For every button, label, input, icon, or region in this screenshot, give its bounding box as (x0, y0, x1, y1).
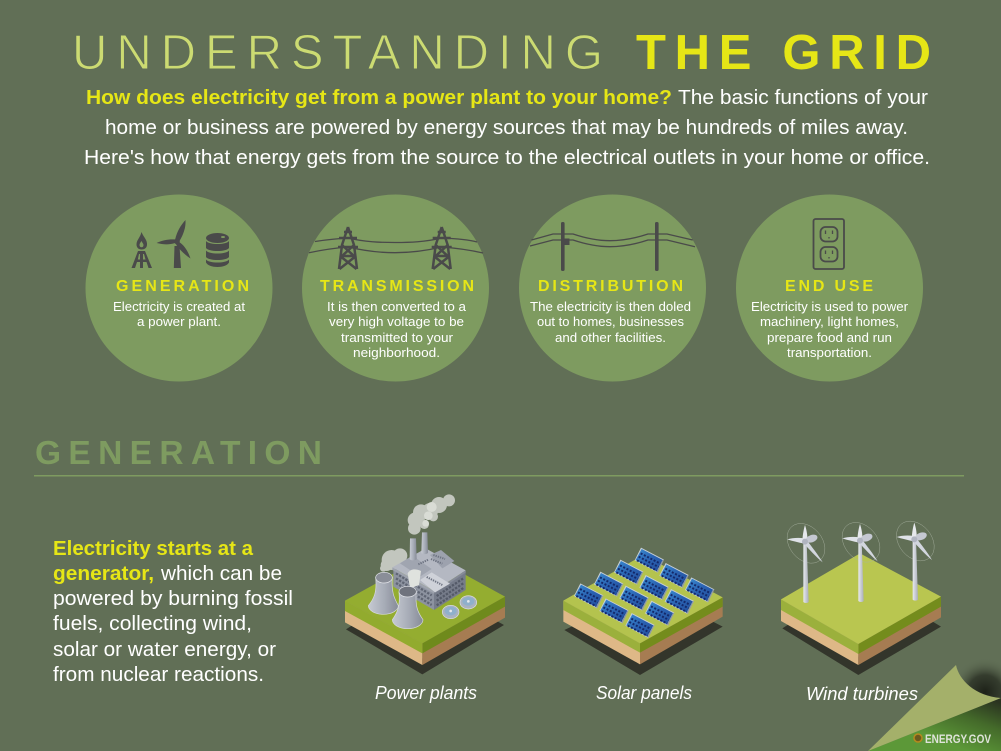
description: end use: machinery, light homes, (760, 315, 899, 329)
description: transmission: neighborhood. (353, 346, 440, 360)
description: transmission: very high voltage to be (329, 315, 464, 329)
title (72, 26, 931, 80)
description: distribution: out to homes, businesses (537, 315, 684, 329)
illustration: solar panels (563, 548, 723, 675)
heading: distribution: DISTRIBUTION (538, 278, 683, 295)
caption: wind turbines: Wind turbines (806, 684, 918, 704)
intro text (84, 86, 930, 169)
icon: electrical outlet (814, 219, 844, 269)
description: end use (751, 300, 908, 360)
cooling towers (368, 572, 423, 629)
text block: electricity starts at a generator: which can be (160, 562, 282, 585)
description: transmission: transmitted to your (341, 331, 453, 345)
intro text: The basic functions of your (678, 86, 928, 109)
description: end use: Electricity is used to power (751, 300, 908, 314)
description: generation: a power plant. (137, 315, 221, 329)
smoke (380, 494, 455, 572)
description: distribution (530, 300, 691, 345)
icon: oil barrel (206, 233, 229, 267)
ground tile (781, 553, 941, 675)
text block: electricity starts at a generator: generator, (53, 562, 154, 585)
description: distribution: and other facilities. (555, 331, 666, 345)
caption: solar panels: Solar panels (596, 683, 692, 703)
logo text: ENERGY.GOV (925, 734, 991, 746)
text block: electricity starts at a generator (53, 537, 293, 686)
factory building (392, 532, 466, 610)
text block: electricity starts at a generator: Electricity starts at a (53, 537, 254, 560)
description: generation (113, 300, 246, 329)
section heading: generation: GENERATION (35, 435, 322, 472)
cooling fans (442, 596, 477, 619)
icon: gas flare rig (132, 232, 152, 268)
description: generation: Electricity is created at (113, 300, 246, 314)
ground tile (563, 555, 723, 675)
ground tile (345, 554, 505, 674)
intro text: Here's how that energy gets from the source to the electrical outlets in your home or office. (84, 146, 930, 169)
heading: transmission: TRANSMISSION (320, 278, 474, 295)
illustration: power plant (345, 494, 505, 674)
description: end use: transportation. (787, 346, 872, 360)
text block: electricity starts at a generator: solar or water energy, or (53, 638, 276, 661)
intro text: home or business are powered by energy sources that may be hundreds of miles away. (105, 116, 908, 139)
illustration: wind turbines (779, 514, 942, 675)
page curl with energy.gov logo (868, 655, 1001, 751)
description: transmission: It is then converted to a (327, 300, 466, 314)
heading: end use: END USE (785, 278, 873, 295)
turbines (779, 514, 942, 603)
text block: electricity starts at a generator: from nuclear reactions. (53, 663, 264, 686)
title: THE GRID (636, 26, 931, 80)
title: UNDERSTANDING (72, 26, 603, 80)
panel: transmission circle (302, 194, 489, 382)
text block: electricity starts at a generator: powered by burning fossil (53, 587, 293, 610)
intro text: How does electricity get from a power plant to your home? (86, 86, 672, 109)
caption: power plants: Power plants (375, 683, 477, 703)
panel: distribution circle (519, 194, 706, 382)
icon: transmission towers and wires (309, 227, 483, 269)
panel: generation circle (86, 194, 272, 382)
icon: utility poles and wires (530, 222, 695, 271)
description: transmission (327, 300, 466, 360)
solar panel array (574, 548, 714, 638)
description: end use: prepare food and run (767, 331, 892, 345)
text block: electricity starts at a generator: fuels, collecting wind, (53, 612, 252, 635)
icon: wind turbine (156, 220, 190, 268)
panel: end use circle (736, 194, 923, 382)
description: distribution: The electricity is then doled (530, 300, 691, 314)
logo icon (914, 734, 922, 742)
heading: generation: GENERATION (116, 278, 249, 295)
